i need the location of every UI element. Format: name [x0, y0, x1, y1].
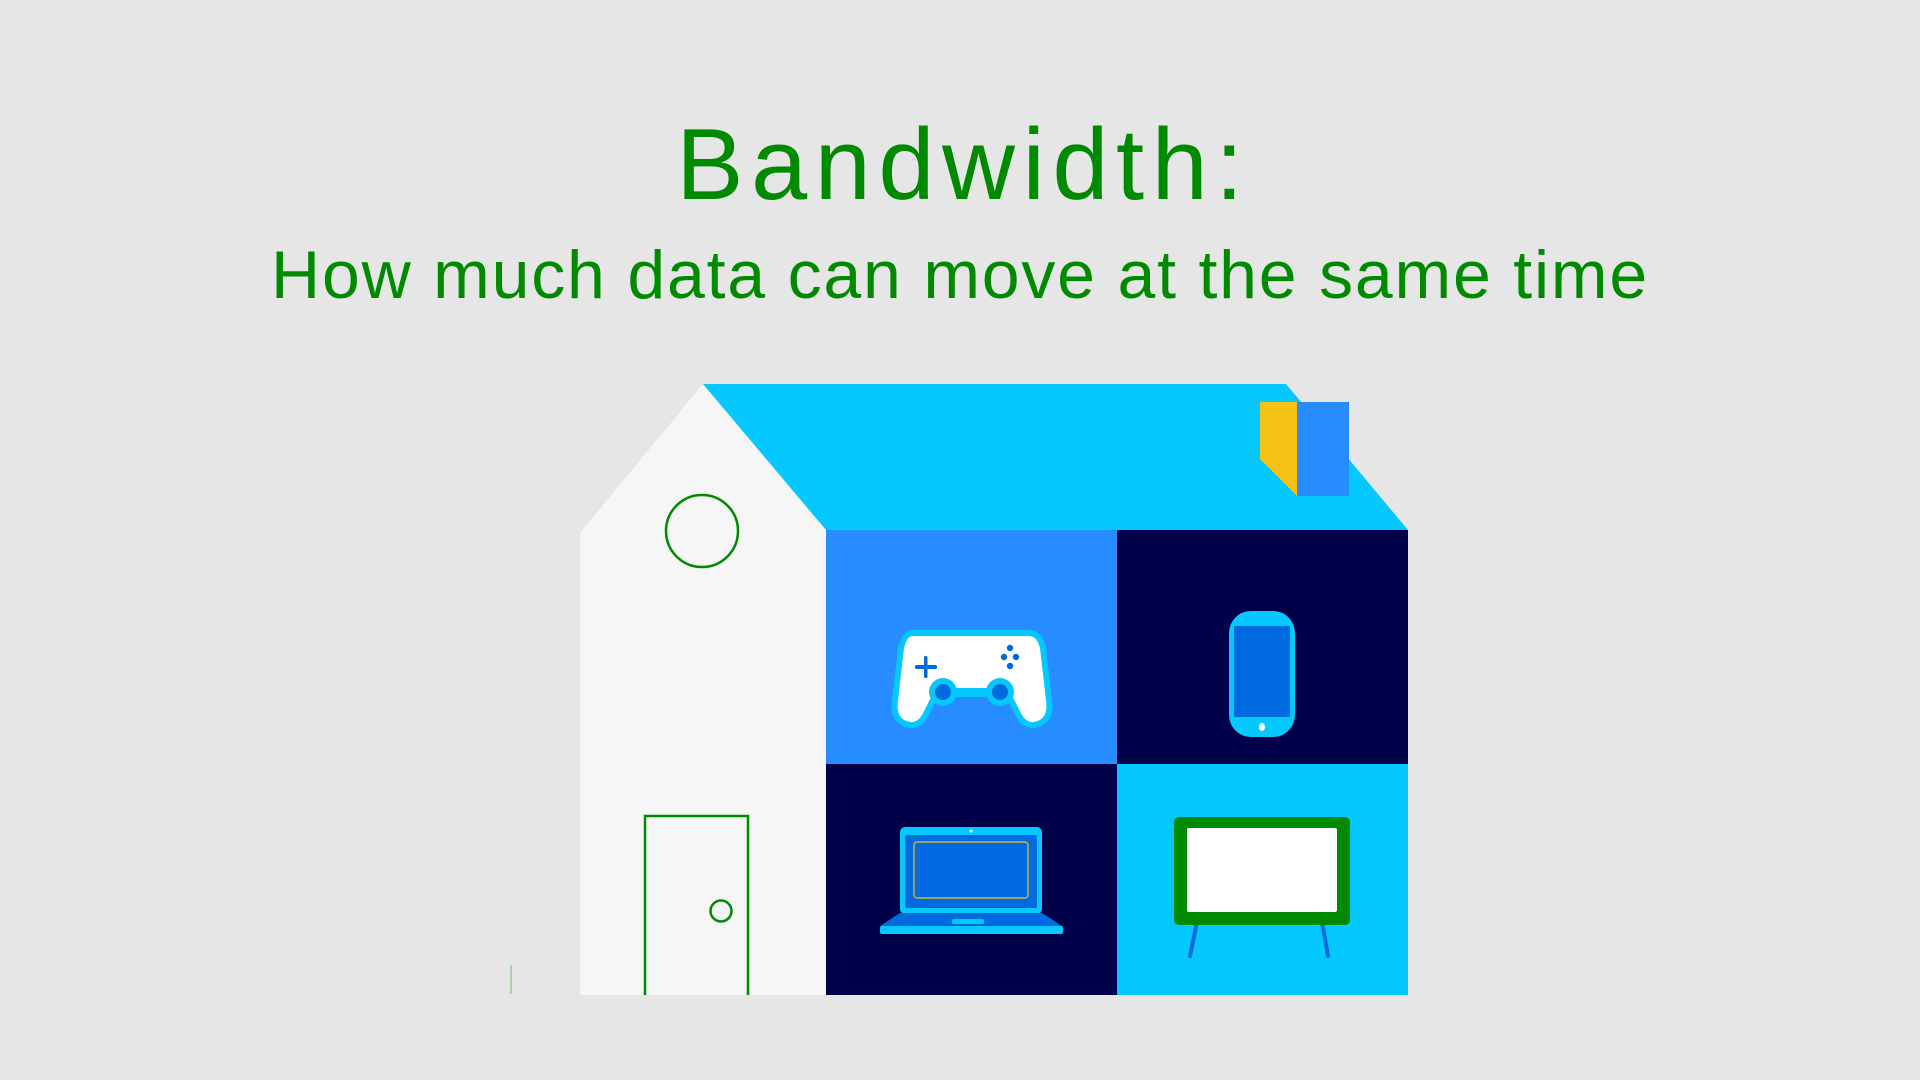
room: laptop: [826, 764, 1117, 995]
title: Bandwidth:: [676, 109, 1251, 221]
faint line: [510, 965, 512, 994]
subtitle: How much data can move at the same time: [271, 237, 1649, 313]
icon: television: [1174, 817, 1350, 956]
room: phone: [1117, 530, 1408, 764]
icon: game controller: [895, 633, 1049, 725]
round window: [666, 495, 738, 567]
room: game console: [826, 530, 1117, 764]
chimney: [1260, 402, 1349, 496]
room: television: [1117, 764, 1408, 995]
house: white gable wall: [580, 384, 826, 995]
icon: smartphone: [1229, 611, 1295, 737]
icon: laptop: [880, 827, 1063, 934]
house: roof: [703, 384, 1408, 530]
door: [645, 816, 748, 995]
